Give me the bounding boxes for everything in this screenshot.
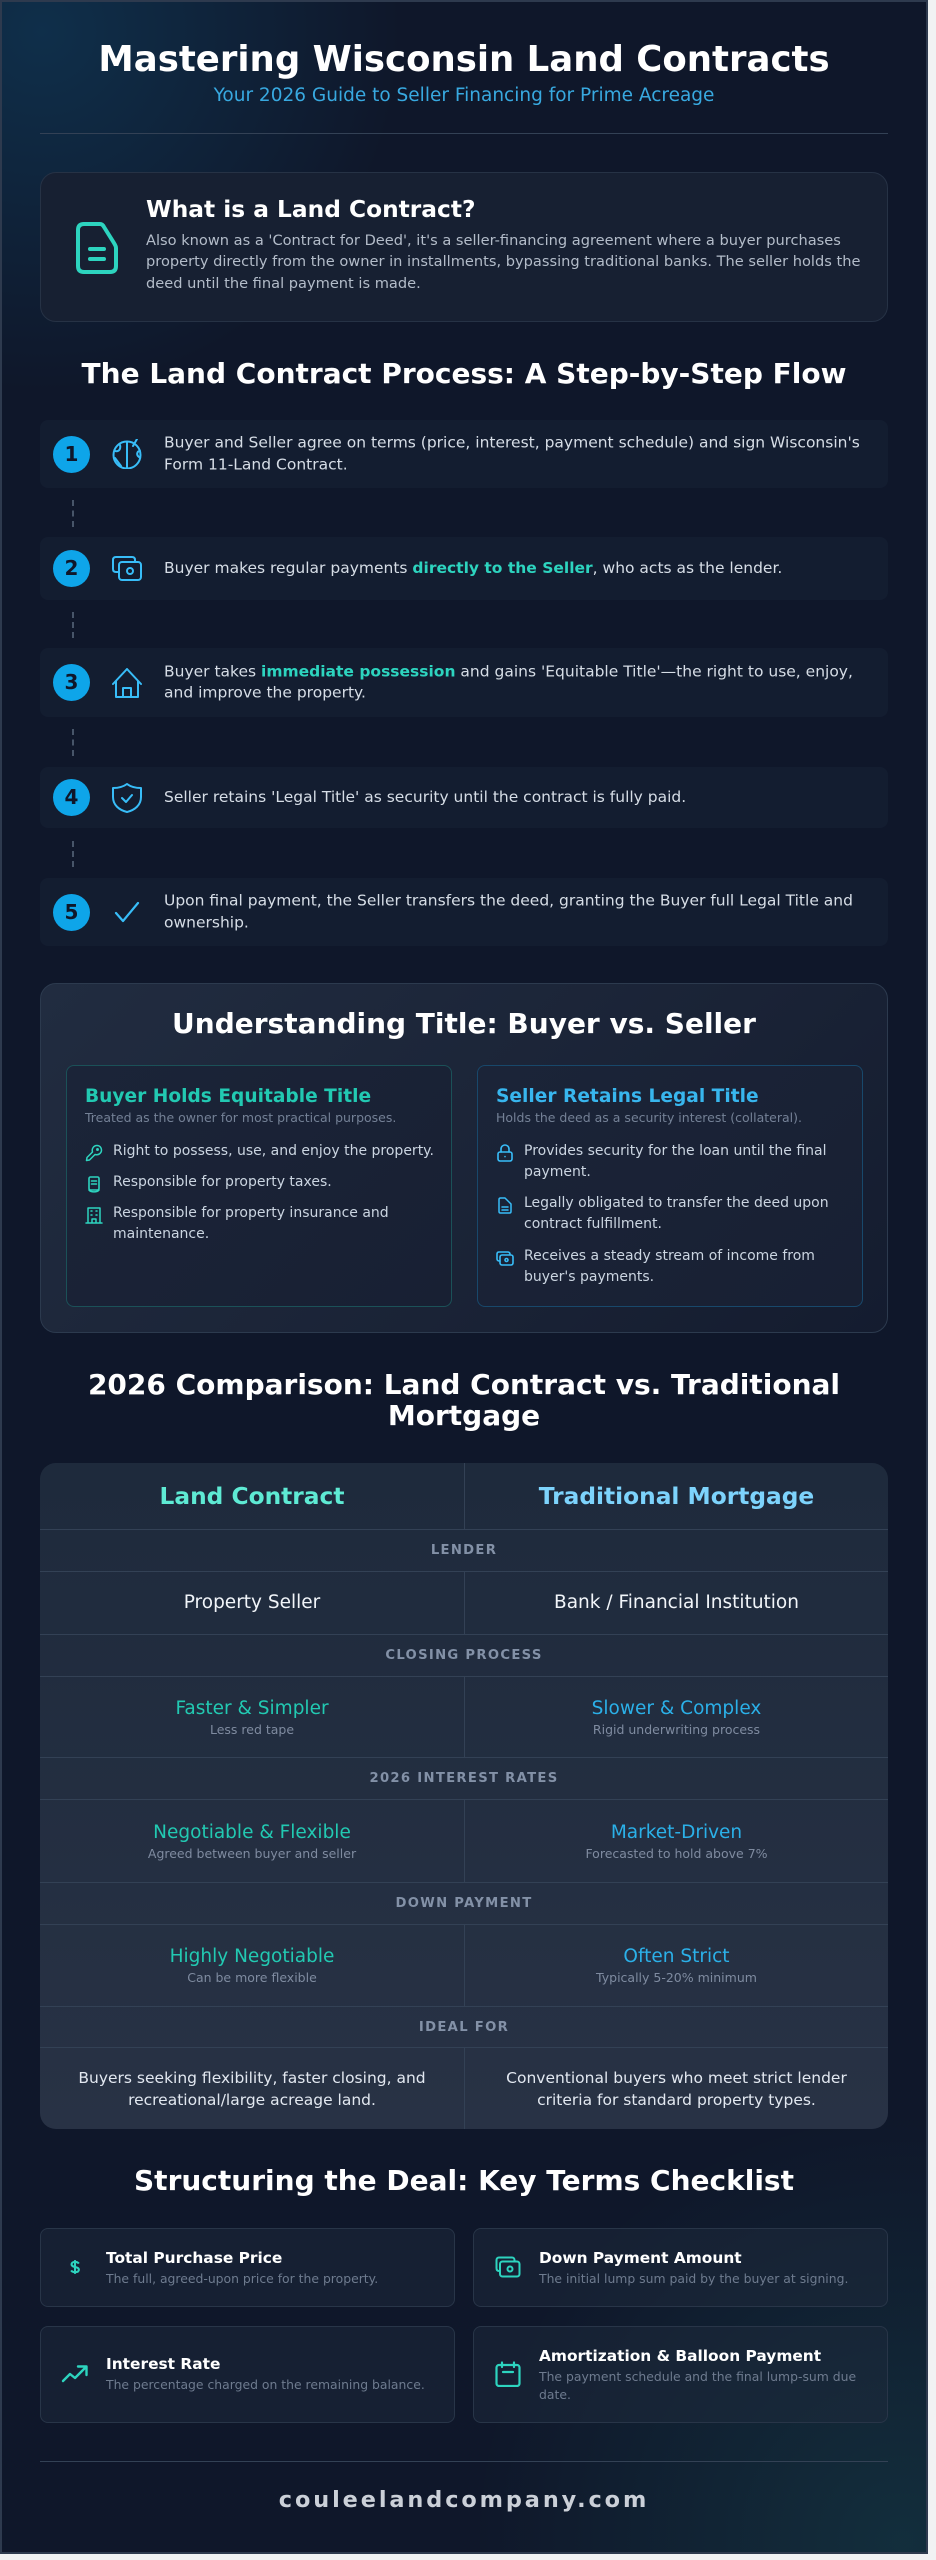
seller point: Provides security for the loan until the final — [524, 1143, 827, 1159]
card description — [146, 232, 860, 292]
step text: Buyer and Seller agree on terms (price, interest, payment schedule) and sign Wisconsin's — [164, 433, 860, 451]
step 5 — [40, 878, 888, 946]
seller point: payment. — [524, 1164, 591, 1180]
step number: 5 — [65, 900, 78, 924]
column head: land contract — [40, 1463, 465, 1529]
step number — [53, 664, 90, 701]
card description: deed until the final payment is made. — [146, 275, 421, 292]
icon: document — [76, 222, 118, 274]
step text: Buyer makes regular payments directly to the Seller, who acts as the lender. — [164, 559, 782, 577]
step 3 — [40, 648, 888, 717]
item description: The payment schedule and the final lump-sum due — [539, 2368, 856, 2384]
heading: comparison — [88, 1368, 840, 1432]
item title: Amortization & Balloon Payment — [539, 2347, 821, 2365]
item description — [539, 2368, 856, 2402]
heading: process: The Land Contract Process: A Step-by-Step Flow — [82, 356, 846, 390]
item description: date. — [539, 2387, 571, 2402]
buyer subheading: Treated as the owner for most practical purposes. — [85, 1110, 396, 1125]
value: land contract: Buyers seeking flexibility, faster closing, and — [78, 2069, 426, 2087]
value: land contract — [40, 1572, 465, 1634]
value: mortgage: Conventional buyers who meet strict lender — [506, 2069, 847, 2087]
buyer point: Responsible for property insurance and — [113, 1205, 389, 1221]
heading: comparison: Mortgage — [388, 1399, 540, 1432]
buyer point — [113, 1205, 389, 1242]
step number — [53, 436, 90, 472]
icon: globe — [112, 439, 142, 469]
checklist: amortization and balloon payment — [473, 2326, 888, 2423]
panel heading: Understanding Title: Buyer vs. Seller — [172, 1007, 756, 1040]
item description: The initial lump sum paid by the buyer at signing. — [539, 2270, 848, 2286]
value: land contract: Agreed between buyer and seller — [148, 1846, 356, 1860]
row label: lender — [40, 1529, 888, 1572]
heading: checklist: Structuring the Deal: Key Terms Checklist — [134, 2164, 794, 2197]
value: land contract: Faster & Simpler — [175, 1698, 329, 1718]
item title: Total Purchase Price — [106, 2249, 282, 2267]
step number: 3 — [65, 670, 78, 694]
value: mortgage: Slower & Complex — [592, 1698, 761, 1718]
item description: The full, agreed-upon price for the property. — [106, 2270, 378, 2286]
row label: down payment: DOWN PAYMENT — [395, 1896, 533, 1911]
item title: Down Payment Amount — [539, 2249, 742, 2267]
seller point — [524, 1195, 829, 1232]
card description: property directly from the owner in installments, bypassing traditional banks. The seller holds the — [146, 253, 860, 270]
step text: Seller retains 'Legal Title' as security until the contract is fully paid. — [164, 788, 686, 806]
card heading: What is a Land Contract? — [146, 196, 475, 223]
icon: shield check — [112, 783, 142, 813]
step text — [164, 433, 860, 473]
step number — [53, 550, 90, 587]
value: mortgage: Rigid underwriting process — [593, 1722, 760, 1736]
step text: Buyer takes immediate possession and gains 'Equitable Title'—the right to use, enjoy, — [164, 662, 853, 680]
comparison table — [40, 1463, 888, 2129]
step number: 2 — [65, 556, 78, 580]
icon: lock — [497, 1144, 513, 1162]
step number — [53, 894, 90, 930]
buyer point: Responsible for property taxes. — [113, 1174, 332, 1190]
value: land contract: Negotiable & Flexible — [153, 1822, 351, 1842]
table header row — [160, 1463, 814, 1529]
value: mortgage — [596, 1946, 757, 1984]
value: mortgage: Typically 5-20% minimum — [596, 1970, 757, 1984]
seller point — [524, 1143, 827, 1180]
value: land contract — [40, 1800, 465, 1882]
value: mortgage: Often Strict — [623, 1946, 730, 1966]
panel: buyer equitable title — [66, 1065, 452, 1307]
panel: seller legal title — [477, 1065, 863, 1307]
buyer heading: Buyer Holds Equitable Title — [85, 1086, 371, 1107]
footer website: couleelandcompany.com — [279, 2487, 649, 2513]
step number: 1 — [65, 442, 78, 466]
row label: interest rates: 2026 INTEREST RATES — [369, 1771, 559, 1786]
row label: closing process: CLOSING PROCESS — [385, 1648, 543, 1663]
row: closing values — [175, 1677, 761, 1757]
step 1 — [40, 420, 888, 488]
buyer point: maintenance. — [113, 1226, 209, 1242]
icon: cash — [496, 2256, 520, 2278]
step text: ownership. — [164, 913, 249, 931]
row: lender values — [184, 1572, 799, 1634]
heading: comparison: 2026 Comparison: Land Contract vs. Traditional — [88, 1368, 840, 1401]
seller heading: Seller Retains Legal Title — [496, 1086, 759, 1107]
step number: 4 — [65, 785, 78, 809]
row label: ideal for — [40, 2006, 888, 2048]
step 2 — [40, 537, 888, 600]
value: land contract: Can be more flexible — [187, 1970, 317, 1984]
icon: document — [498, 1197, 512, 1214]
title: Mastering Wisconsin Land Contracts — [98, 38, 830, 80]
row: down payment values — [170, 1925, 757, 2006]
row: ideal for values — [78, 2048, 847, 2129]
column head: traditional mortgage: Traditional Mortgage — [539, 1482, 814, 1510]
value: land contract: Property Seller — [184, 1592, 320, 1613]
icon: cash — [496, 1251, 514, 1266]
row label: interest rates — [40, 1757, 888, 1800]
seller point: Legally obligated to transfer the deed upon — [524, 1195, 829, 1211]
seller subheading: Holds the deed as a security interest (collateral). — [496, 1110, 802, 1125]
icon: receipt — [88, 1176, 100, 1193]
row label: closing process — [40, 1634, 888, 1677]
buyer point: Right to possess, use, and enjoy the property. — [113, 1143, 434, 1159]
icon: dollar — [70, 2260, 80, 2274]
value: land contract — [40, 1925, 465, 2006]
panel: understanding title — [40, 983, 888, 1333]
panel: what is a land contract — [40, 172, 888, 322]
step number — [53, 779, 90, 816]
step text: Form 11-Land Contract. — [164, 455, 348, 473]
item title: Interest Rate — [106, 2355, 220, 2373]
icon: cash — [112, 556, 142, 581]
value: land contract: recreational/large acreage land. — [128, 2090, 376, 2108]
icon: key — [86, 1144, 102, 1162]
item description: The percentage charged on the remaining balance. — [106, 2376, 425, 2392]
icon: calendar — [495, 2361, 521, 2387]
step text: and improve the property. — [164, 684, 366, 702]
value: mortgage: Bank / Financial Institution — [554, 1592, 799, 1613]
icon: house — [112, 668, 142, 698]
checklist: down payment amount — [473, 2228, 888, 2307]
step text — [164, 662, 853, 702]
seller point: Receives a steady stream of income from — [524, 1248, 815, 1264]
step 4 — [40, 767, 888, 828]
step text — [164, 891, 853, 931]
value: land contract — [40, 1677, 465, 1757]
value: mortgage: Market-Driven — [611, 1822, 742, 1842]
value: mortgage — [506, 2069, 847, 2108]
row label: down payment — [40, 1882, 888, 1925]
row label: lender: LENDER — [431, 1543, 497, 1558]
value: mortgage — [585, 1822, 768, 1860]
value: land contract: Highly Negotiable — [170, 1946, 334, 1966]
value: land contract: Less red tape — [210, 1722, 294, 1736]
icon: trend up — [62, 2365, 88, 2382]
checklist: interest rate — [40, 2326, 455, 2423]
row label: ideal for: IDEAL FOR — [419, 2020, 509, 2034]
row: interest values — [148, 1800, 768, 1882]
seller point — [524, 1248, 815, 1285]
value: land contract — [40, 2048, 465, 2129]
value: mortgage — [592, 1698, 761, 1736]
card description: Also known as a 'Contract for Deed', it's a seller-financing agreement where a buyer purchases — [146, 232, 841, 249]
checklist: total purchase price — [40, 2228, 455, 2307]
seller point: buyer's payments. — [524, 1269, 654, 1285]
subtitle: Your 2026 Guide to Seller Financing for Prime Acreage — [214, 85, 714, 106]
value: mortgage: Forecasted to hold above 7% — [585, 1846, 768, 1860]
column head: land contract: Land Contract — [160, 1482, 344, 1510]
icon: building — [85, 1207, 103, 1224]
seller point: contract fulfillment. — [524, 1216, 662, 1232]
value: mortgage: criteria for standard property types. — [537, 2090, 816, 2108]
step text: Upon final payment, the Seller transfers the deed, granting the Buyer full Legal Title and — [164, 891, 853, 909]
icon: check — [114, 902, 140, 922]
